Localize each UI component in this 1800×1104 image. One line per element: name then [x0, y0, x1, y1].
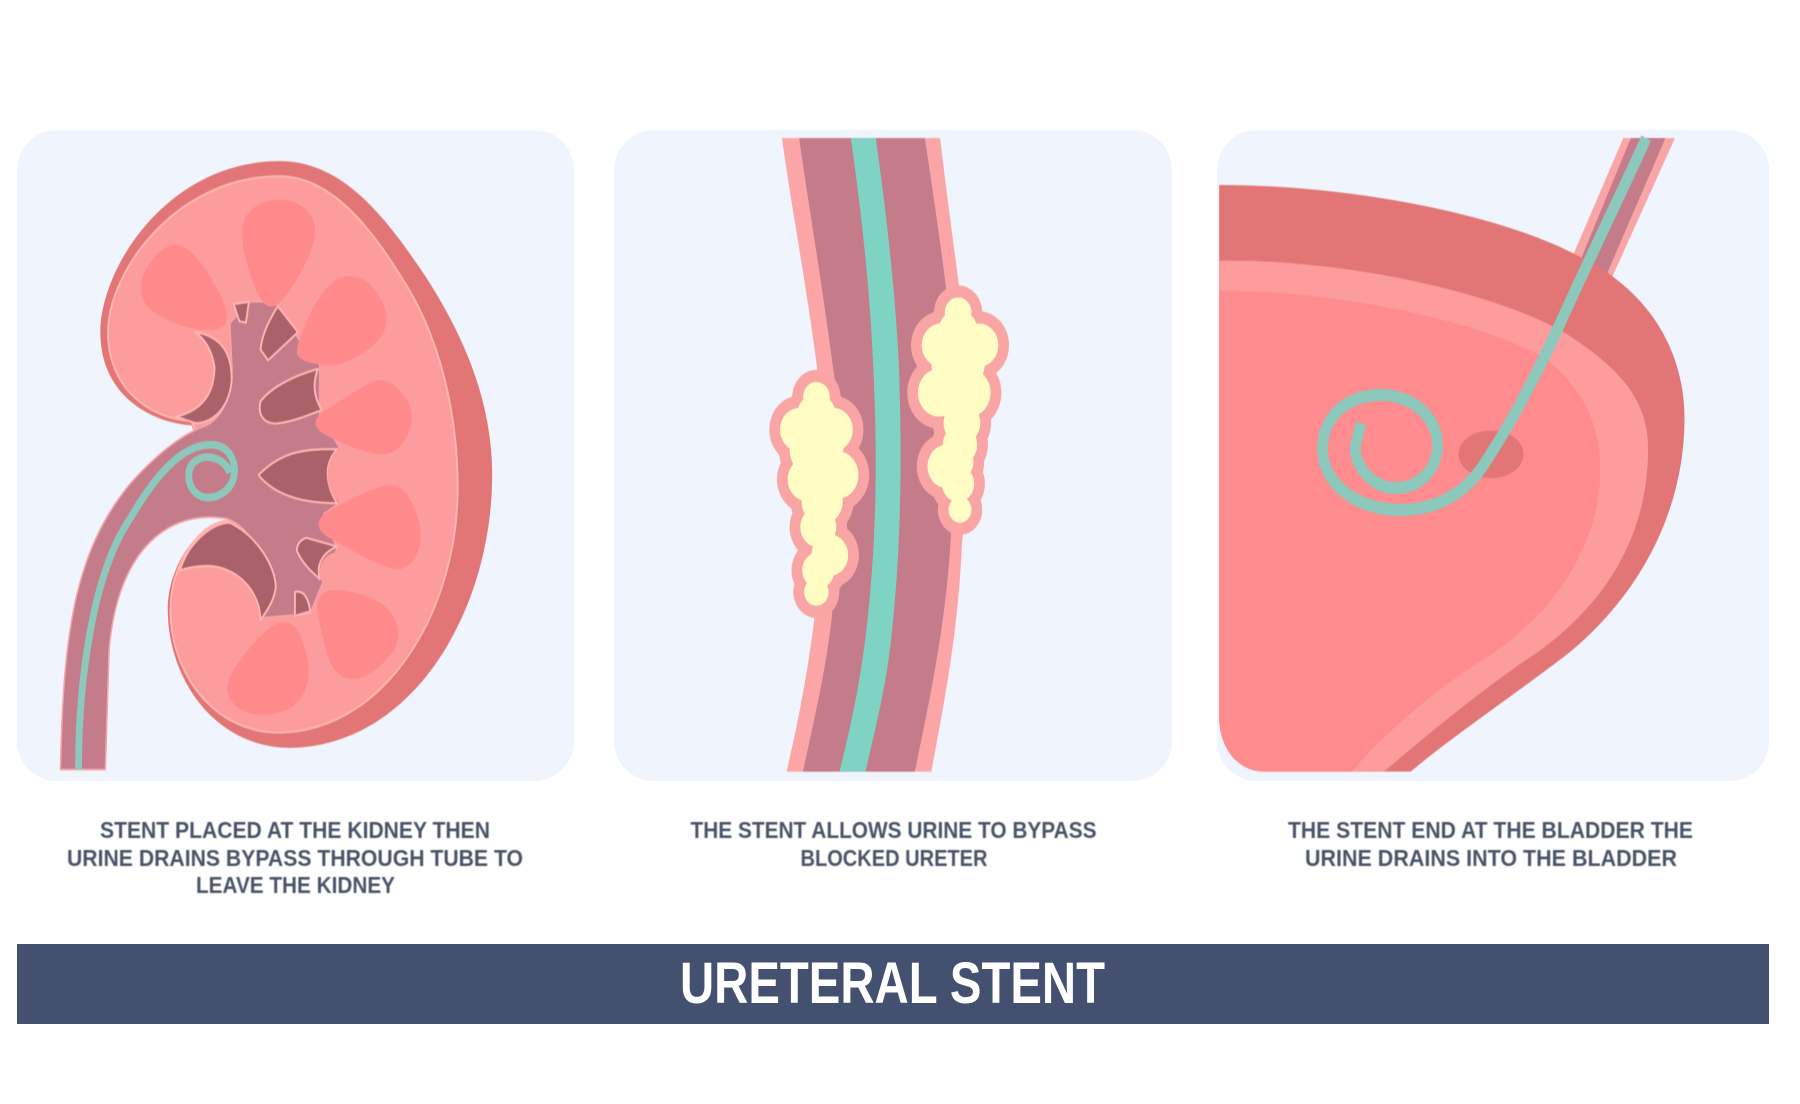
kidney cortex [108, 176, 458, 733]
caption: bladder: THE STENT END AT THE BLADDER THE [1288, 817, 1693, 843]
calyces [176, 302, 337, 620]
bladder wall [1219, 185, 1684, 772]
cortex lobes between pyramids [319, 364, 366, 593]
blockage left [769, 370, 869, 618]
panel: kidney [17, 130, 574, 781]
ureter illustration [769, 138, 1009, 772]
ureter lumen [799, 138, 953, 772]
stent tube [839, 138, 901, 772]
caption: bladder: URINE DRAINS INTO THE BLADDER [1305, 845, 1677, 871]
panel: blocked ureter [614, 130, 1172, 781]
ureter wall [782, 138, 967, 772]
stent coil in kidney [79, 445, 235, 770]
caption: blocked ureter: BLOCKED URETER [800, 845, 988, 871]
caption: kidney: LEAVE THE KIDNEY [196, 872, 395, 898]
caption: kidney [67, 817, 523, 898]
caption: blocked ureter [690, 817, 1096, 871]
caption: bladder [1288, 817, 1693, 871]
bladder mucosa [1219, 261, 1648, 772]
ureter entering bladder [1573, 138, 1675, 278]
stent coil in bladder [1323, 138, 1646, 510]
ureteral opening [1459, 430, 1524, 478]
title: URETERAL STENT [680, 951, 1105, 1016]
caption: blocked ureter: THE STENT ALLOWS URINE TO BYPASS [690, 817, 1096, 843]
renal pyramids [143, 202, 418, 713]
blockage right [907, 285, 1009, 535]
caption: kidney: STENT PLACED AT THE KIDNEY THEN [100, 817, 490, 843]
title banner [17, 944, 1769, 1024]
bladder lumen [1219, 291, 1600, 772]
kidney capsule [100, 161, 492, 748]
kidney illustration [61, 161, 492, 769]
caption: kidney: URINE DRAINS BYPASS THROUGH TUBE TO [67, 845, 523, 871]
panel: bladder [1217, 130, 1769, 781]
renal pelvis and ureter [61, 302, 339, 770]
bladder illustration [1219, 138, 1684, 772]
